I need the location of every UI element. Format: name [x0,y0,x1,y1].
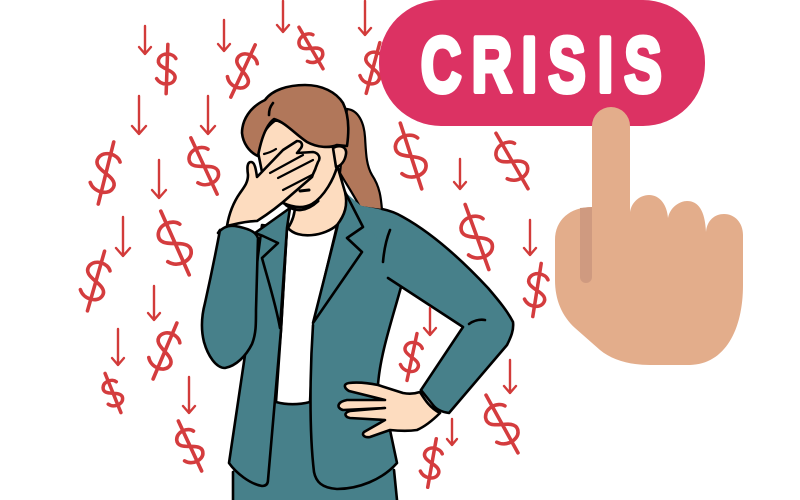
woman in teal suit covering her face [202,85,513,500]
covering hand [227,141,319,226]
falling dollar signs [75,23,550,489]
head [242,85,348,210]
lapels [255,192,363,328]
sleeve outline [382,209,513,413]
hair strand [269,103,273,115]
white shirt [276,226,337,404]
jacket left sleeve [202,226,258,368]
jacket right sleeve [345,193,513,413]
skirt [233,398,397,500]
hip hand [338,383,440,437]
jacket body right panel [310,192,401,489]
skirt side lines [233,470,397,500]
pointing hand [555,107,743,365]
arm and waist outlines [378,230,485,390]
dollar inside the arm gap [397,331,425,382]
arrow inside the arm gap [424,308,436,335]
thumb shading [580,207,592,283]
face [258,120,337,207]
falling arrows [112,1,536,445]
finger lines [270,155,313,190]
mouth and chin shadow [286,190,318,210]
ponytail [340,109,382,210]
ear [333,146,346,167]
gap between arm and waist [378,287,463,394]
closed eye [264,149,276,154]
CRISIS label: CRISIS [421,21,662,109]
CRISIS button [379,0,705,126]
hair [242,85,348,156]
neck [288,168,346,235]
jacket right panel outline [310,325,397,489]
jacket body left panel [229,225,287,486]
